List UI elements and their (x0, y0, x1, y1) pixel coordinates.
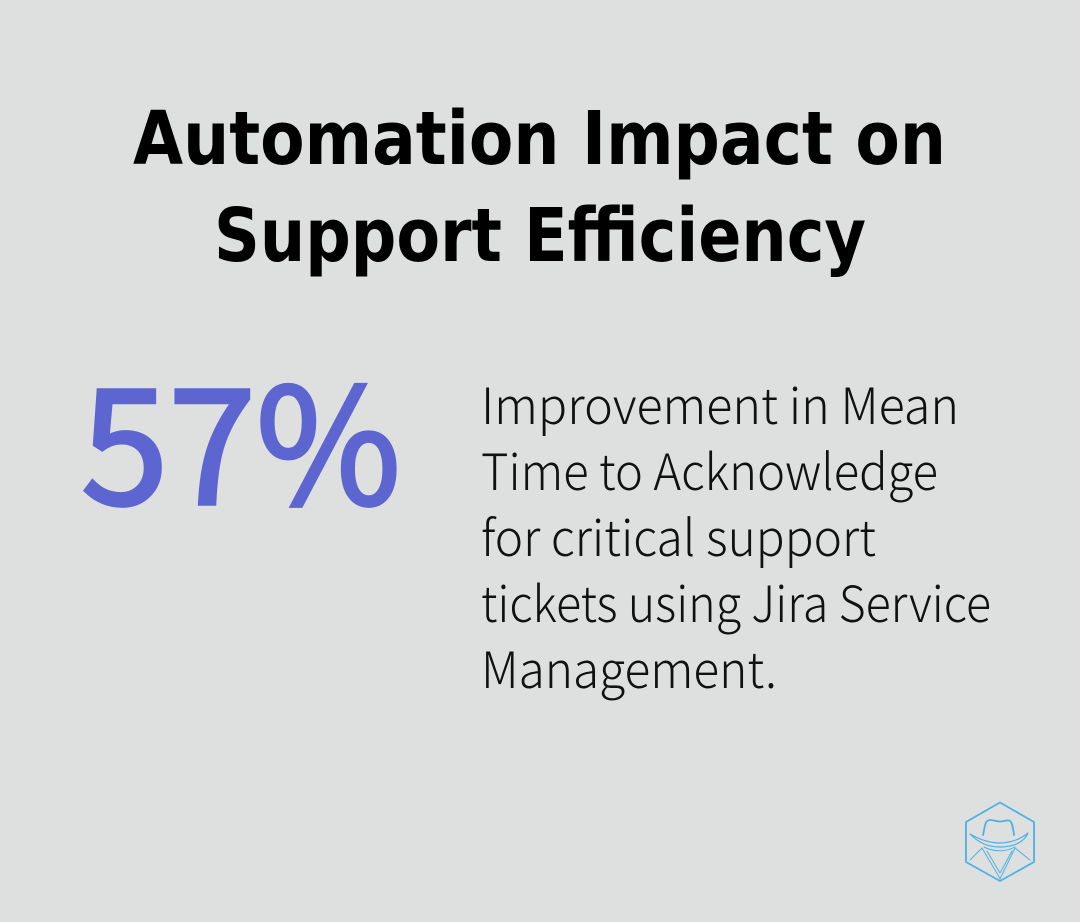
icon: hexagon logo with detective hat (966, 802, 1034, 881)
icon: hat brim (970, 833, 1028, 847)
icon: collar and lapels (970, 847, 1030, 879)
big statistic: 57%: 57% (81, 319, 401, 551)
description text: for critical support (481, 499, 876, 571)
description text: Management. (481, 631, 777, 703)
description text: Time to Acknowledge (481, 433, 938, 505)
title: Automation Impact on (133, 96, 946, 182)
icon: hexagon outline (966, 802, 1034, 881)
description text (481, 367, 991, 703)
icon: hat crown (983, 820, 1014, 835)
description text: Improvement in Mean (481, 367, 959, 439)
title (133, 96, 946, 279)
description text: tickets using Jira Service (481, 565, 991, 637)
title: Support Efficiency (214, 193, 866, 279)
